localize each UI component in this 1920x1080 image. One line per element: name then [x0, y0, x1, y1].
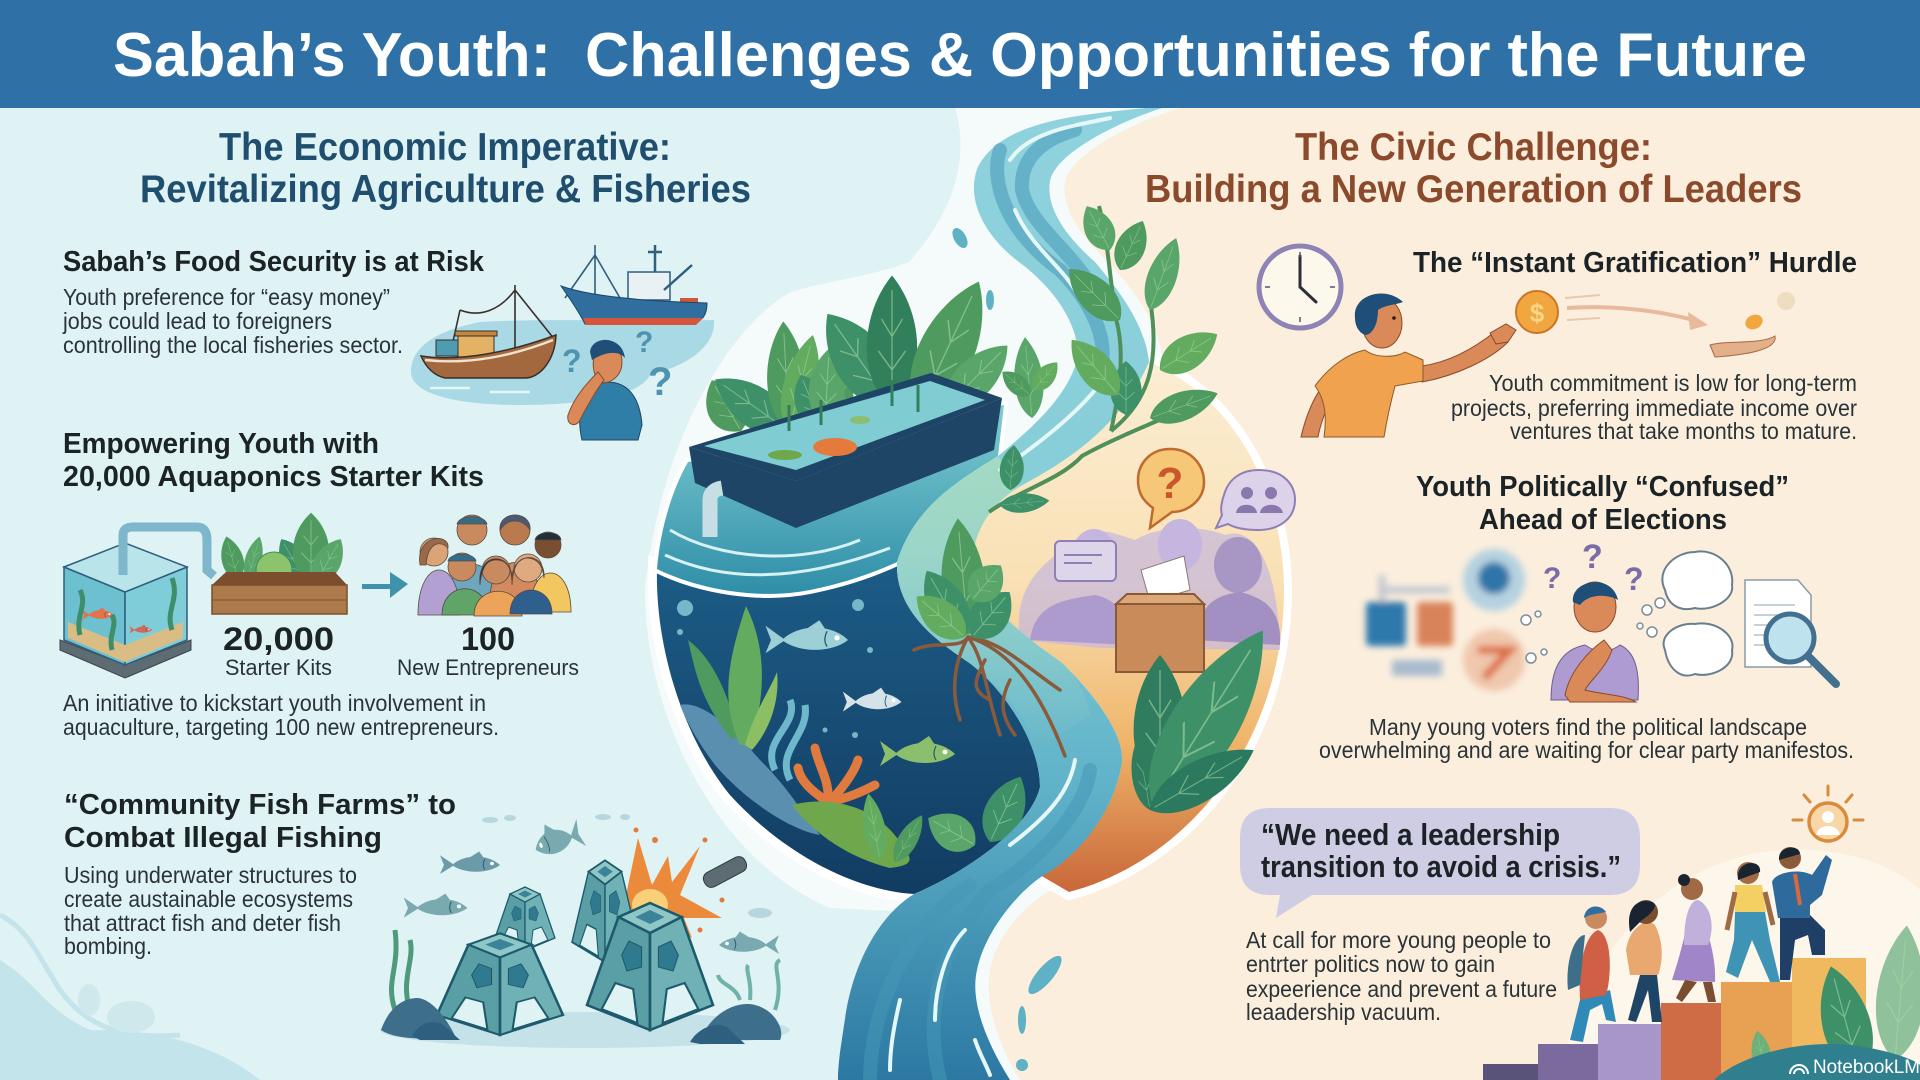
block: instant gratification text	[1413, 247, 1857, 444]
heading: economic imperative: Revitalizing Agriculture & Fisheries	[140, 168, 751, 211]
fishing boat	[421, 285, 556, 392]
stairs	[1483, 958, 1866, 1080]
cargo ship	[561, 245, 707, 325]
splash drops	[949, 225, 1067, 1071]
lower plants	[858, 769, 1038, 867]
heading: civic challenge: The Civic Challenge:	[1295, 126, 1652, 169]
leadership body text: entrter politics now to gain	[1246, 951, 1495, 977]
aquaponics body text: An initiative to kickstart youth involvement in	[63, 690, 486, 716]
question marks: ?	[648, 360, 672, 404]
leadership body text: expeerience and prevent a future	[1246, 976, 1557, 1002]
block: community fish farms text: bombing.	[64, 933, 152, 959]
pale backdrop: stairs	[1560, 849, 1920, 1080]
quote bubble: transition to avoid a crisis.”	[1261, 849, 1621, 884]
illustration: coin and hand: $	[1530, 298, 1545, 328]
ballot box	[1116, 556, 1204, 672]
seabed rocks	[680, 704, 820, 835]
light water layer	[657, 405, 1004, 594]
block: food security text	[62, 246, 485, 358]
stat: 100 new entrepreneurs: 100	[461, 621, 515, 657]
rooted plant on river	[906, 517, 1065, 756]
aquaponics body text: aquaculture, targeting 100 new entrepreneurs.	[63, 714, 499, 740]
re-draw front leaf stems	[789, 380, 918, 431]
water surface lines	[665, 530, 890, 575]
block: community fish farms text: create austainable ecosystems	[64, 886, 353, 912]
green mound	[792, 801, 910, 868]
reef frames	[572, 860, 638, 962]
question marks: ?	[635, 326, 653, 359]
rocks	[381, 998, 455, 1038]
plant in civic circle	[1125, 613, 1291, 828]
title: Sabah’s Youth: Challenges & Opportunities for the Future	[113, 21, 1807, 90]
block: community fish farms text: “Community Fish Farms” to	[64, 789, 456, 821]
heading: economic imperative: The Economic Imperative:	[219, 126, 671, 169]
illustration: youth reaching for coin	[1301, 293, 1516, 437]
bomb	[701, 854, 749, 890]
block: community fish farms text: Using underwater structures to	[64, 862, 357, 888]
vine over river	[989, 200, 1226, 515]
heading: economic imperative	[140, 126, 751, 211]
people bubble	[1216, 470, 1295, 530]
river	[838, 108, 1162, 1080]
thought dots	[1521, 598, 1665, 663]
watermark: NotebookLM: NotebookLM	[1813, 1057, 1920, 1078]
river white highlights	[890, 118, 1110, 1075]
block: aquaponics heading: 20,000 Aquaponics Starter Kits	[63, 461, 484, 493]
block: aquaponics heading	[63, 428, 484, 493]
block: instant gratification text: projects, preferring immediate income over	[1451, 395, 1857, 421]
distant fish	[482, 814, 772, 918]
confused question marks	[1543, 538, 1644, 597]
tank body	[689, 398, 1002, 528]
decorative wave: lower left corner	[0, 915, 260, 1080]
crate greens	[216, 534, 248, 583]
background: left teal panel	[0, 108, 961, 1080]
tank plants	[694, 270, 1021, 448]
leadership body text	[1246, 927, 1557, 1025]
confused question marks: ?	[1543, 562, 1561, 595]
figure 4	[1726, 862, 1780, 982]
illustration: clock	[1259, 246, 1341, 328]
figure 3	[1672, 874, 1716, 1002]
heading: politically confused: Youth Politically “Confused”	[1416, 471, 1789, 503]
bubbles	[677, 599, 873, 738]
reef fish	[440, 852, 500, 874]
explosion	[625, 838, 722, 938]
stat: 20,000 starter kits: Starter Kits	[225, 655, 332, 680]
aquaponics tank with plants	[689, 270, 1021, 537]
question bubble: ?	[1157, 459, 1183, 508]
figure 1	[1567, 906, 1616, 1042]
block: food security text: controlling the local fisheries sector.	[63, 332, 403, 358]
block: food security text: Sabah’s Food Security is at Risk	[63, 246, 485, 278]
stat: 100 new entrepreneurs	[397, 621, 579, 680]
stat: 20,000 starter kits	[223, 621, 334, 680]
base	[60, 640, 191, 678]
illustration: artificial reef	[380, 814, 790, 1048]
arrow: kits to people	[362, 572, 408, 598]
figure 5	[1772, 847, 1832, 980]
stat: 20,000 starter kits: 20,000	[223, 621, 334, 657]
block: instant gratification text: ventures that take months to mature.	[1510, 418, 1857, 444]
heading: civic challenge	[1145, 126, 1802, 211]
block: community fish farms text: Combat Illegal Fishing	[64, 822, 382, 854]
block: aquaponics heading: Empowering Youth with	[63, 428, 379, 460]
block: food security text: Youth preference for “easy money”	[63, 284, 390, 310]
pipe	[123, 527, 214, 576]
seabed shadow	[380, 1012, 790, 1048]
politically confused body text: overwhelming and are waiting for clear party manifestos.	[1319, 737, 1854, 763]
heading: politically confused: Ahead of Elections	[1479, 504, 1727, 536]
central scene: civic circle	[972, 362, 1295, 892]
header bar	[0, 0, 1920, 108]
thought clouds	[1662, 551, 1732, 676]
heading: civic challenge: Building a New Generation of Leaders	[1145, 168, 1802, 211]
block: community fish farms text: that attract fish and deter fish	[64, 910, 341, 936]
illustration: coin and hand	[1516, 291, 1795, 357]
background: right peach panel	[989, 108, 1920, 1080]
figure 2	[1626, 900, 1662, 1022]
illustration: boats and thinking youth	[411, 245, 714, 440]
illustration: people group	[418, 515, 571, 616]
question marks: ?	[562, 343, 582, 379]
river darker streaks	[870, 130, 1103, 1080]
question bubble	[1138, 449, 1204, 528]
block: instant gratification text: The “Instant Gratification” Hurdle	[1413, 247, 1857, 279]
tank	[64, 567, 125, 665]
quote bubble	[1240, 808, 1640, 918]
card icon	[1055, 541, 1116, 581]
document with magnifier	[1745, 580, 1836, 684]
politically confused body text: Many young voters find the political landscape	[1369, 714, 1807, 740]
lilac crowd silhouettes	[1019, 519, 1280, 650]
politically confused body text	[1319, 714, 1854, 763]
river green band	[897, 456, 1090, 750]
aquaponics body text	[63, 690, 499, 740]
heading: politically confused	[1416, 471, 1789, 536]
sea patch	[411, 320, 714, 405]
illustration: confused youth	[1551, 582, 1638, 702]
block: community fish farms text	[64, 789, 456, 959]
confused question marks: ?	[1582, 538, 1603, 576]
central scene: blob deep water	[657, 405, 1040, 894]
illustration: aquarium kit	[60, 513, 352, 678]
question marks	[562, 326, 672, 404]
corner foliage	[1714, 923, 1920, 1080]
aquarium fish	[82, 607, 114, 620]
stat: 100 new entrepreneurs: New Entrepreneurs	[397, 655, 579, 680]
reef weeds	[391, 930, 411, 1010]
outlet pipe	[710, 488, 722, 537]
block: instant gratification text: Youth commitment is low for long-term	[1489, 370, 1857, 396]
leadership body text: At call for more young people to	[1246, 927, 1551, 953]
quote text: “We need a leadership	[1261, 817, 1560, 852]
crate	[212, 572, 347, 585]
youth figure	[568, 340, 642, 440]
seaweed	[688, 606, 805, 780]
climbing figures	[1567, 847, 1832, 1042]
leadership body text: leaadership vacuum.	[1246, 999, 1441, 1025]
sparks	[634, 828, 724, 932]
block: food security text: jobs could lead to foreigners	[62, 308, 332, 334]
confused question marks: ?	[1624, 561, 1644, 597]
fish	[766, 620, 955, 766]
coral	[798, 748, 875, 802]
illustration: blurred party icons	[1366, 549, 1525, 691]
leadership sun icon	[1793, 786, 1863, 841]
tank fish	[813, 438, 857, 456]
